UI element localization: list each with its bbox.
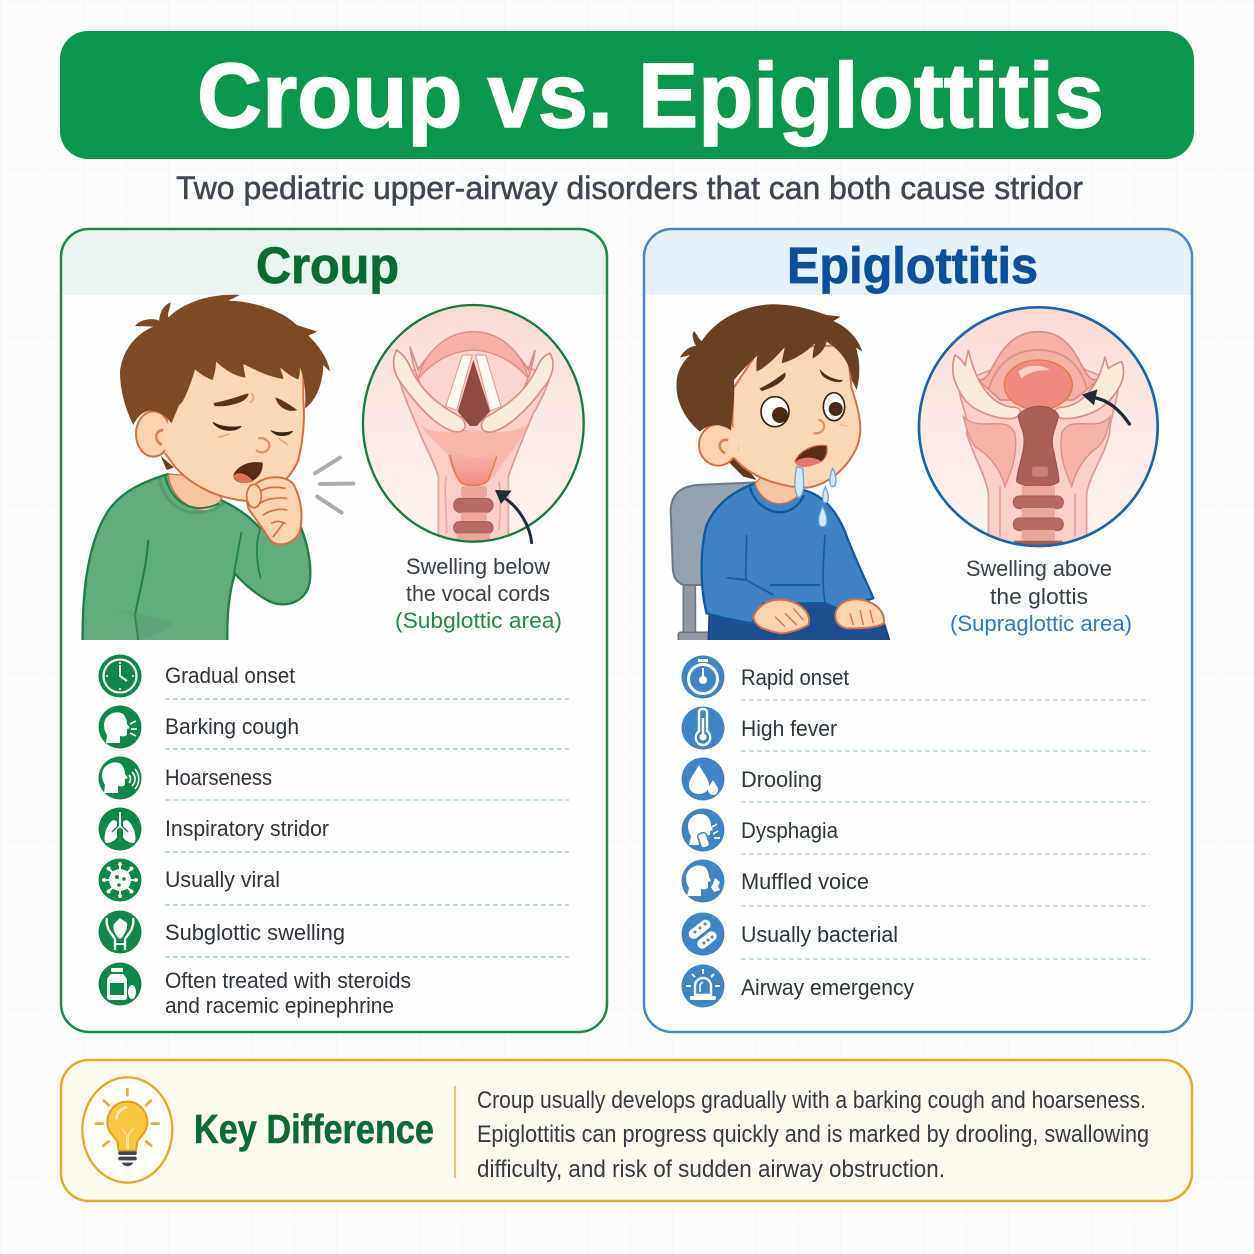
symptom text: Often treated with steroids: [165, 968, 411, 993]
symptom text: Drooling: [741, 767, 822, 792]
callout: supraglottic location: the glottis: [990, 584, 1088, 609]
icon: virus: [98, 858, 142, 902]
illustration: supraglottic airway: [919, 307, 1158, 547]
callout: supraglottic location: Swelling above: [966, 556, 1112, 581]
symptom text: Usually viral: [165, 867, 280, 892]
icon: stopwatch: [682, 656, 724, 698]
icon: barking cough: [98, 706, 142, 748]
icon: muffled voice: [682, 860, 724, 902]
callout: subglottic location: [395, 554, 562, 633]
icon: medicine: [98, 962, 142, 1006]
symptom text: High fever: [741, 716, 837, 741]
symptom text: Hoarseness: [165, 765, 272, 790]
subtitle: Two pediatric upper-airway disorders that can both cause stridor: [176, 170, 1083, 206]
icon: thermometer: [682, 706, 724, 750]
symptom text: Dysphagia: [741, 818, 838, 843]
callout: subglottic location: (Subglottic area): [395, 608, 562, 633]
key difference text: [477, 1087, 1149, 1183]
symptom list: epiglottitis: [682, 656, 1150, 1008]
panel: croup: [61, 229, 607, 1032]
symptom text: Gradual onset: [165, 663, 296, 688]
symptom text: Inspiratory stridor: [165, 816, 329, 841]
symptom text: [165, 663, 411, 1018]
title banner: [60, 31, 1194, 159]
symptom list: croup: [98, 654, 569, 1018]
callout: supraglottic location: (Supraglottic area): [950, 611, 1132, 636]
icon: dysphagia: [682, 808, 724, 852]
symptom text: Usually bacterial: [741, 922, 898, 947]
icon: droplets: [682, 758, 724, 800]
key difference text: Epiglottitis can progress quickly and is marked by drooling, swallowing: [477, 1121, 1149, 1148]
callout: supraglottic location: [950, 556, 1132, 636]
symptom text: Barking cough: [165, 714, 299, 739]
epiglottitis heading: Epiglottitis: [787, 237, 1038, 294]
title: Croup vs. Epiglottitis: [197, 45, 1104, 147]
panel: key difference: [61, 1060, 1192, 1201]
panel: epiglottitis: [644, 229, 1192, 1032]
symptom text: Subglottic swelling: [165, 920, 345, 945]
symptom text: and racemic epinephrine: [165, 993, 394, 1018]
icon: alarm: [682, 964, 724, 1008]
icon: light bulb: [82, 1077, 172, 1183]
callout: subglottic location: Swelling below: [406, 554, 550, 579]
key difference text: Croup usually develops gradually with a barking cough and hoarseness.: [477, 1087, 1146, 1114]
icon: bacteria: [682, 912, 724, 956]
icon: hoarseness: [98, 756, 142, 800]
croup heading: Croup: [256, 237, 399, 294]
icon: lungs: [98, 808, 142, 850]
illustration: coughing boy: [83, 295, 353, 643]
key difference text: difficulty, and risk of sudden airway obstruction.: [477, 1156, 945, 1183]
illustration: drooling boy: [671, 304, 890, 642]
callout: subglottic location: the vocal cords: [406, 581, 550, 606]
illustration: subglottic airway: [363, 305, 584, 543]
symptom text: Rapid onset: [741, 665, 850, 690]
symptom text: [741, 665, 915, 1000]
symptom text: Muffled voice: [741, 869, 869, 894]
symptom text: Airway emergency: [741, 975, 915, 1000]
icon: clock: [98, 654, 142, 698]
key difference heading: Key Difference: [194, 1106, 434, 1152]
icon: swollen airway: [98, 910, 142, 954]
